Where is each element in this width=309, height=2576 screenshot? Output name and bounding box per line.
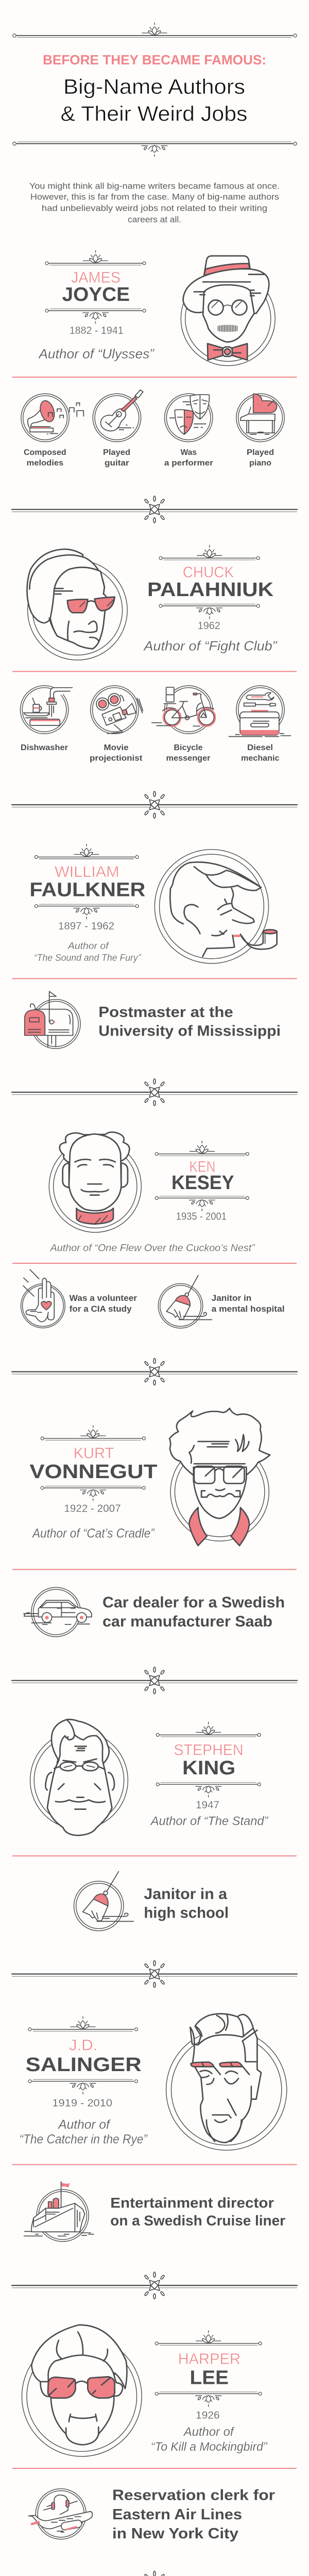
name: LEE xyxy=(190,2367,229,2388)
icon: mailbox xyxy=(25,991,80,1048)
name xyxy=(62,269,130,306)
icon: broom xyxy=(158,1275,212,1328)
intro text: However, this is far from the case. Many of big-name authors xyxy=(30,193,279,202)
ornament xyxy=(155,2331,262,2345)
ornament xyxy=(28,2079,138,2094)
icon: airplane and headset xyxy=(28,2489,92,2539)
icon: bicycle xyxy=(152,686,216,734)
label xyxy=(103,448,130,468)
title xyxy=(43,52,266,126)
ornament xyxy=(156,1722,261,1737)
pink rule xyxy=(12,671,297,672)
ornament xyxy=(35,844,139,859)
job text: Entertainment director xyxy=(110,2195,274,2211)
ornament xyxy=(45,309,146,324)
ornament xyxy=(155,2392,262,2406)
job text: on a Swedish Cruise liner xyxy=(110,2212,285,2228)
label: melodies xyxy=(27,459,63,468)
portrait: Lee xyxy=(22,2325,142,2456)
book: Author of “Cat’s Cradle” xyxy=(31,1526,155,1540)
job text: Car dealer for a Swedish xyxy=(102,1594,285,1611)
name: KURT xyxy=(74,1445,114,1462)
intro text: had unbelievably weird jobs not related to their writing xyxy=(42,204,267,213)
job text xyxy=(112,2487,275,2542)
name: KING xyxy=(182,1757,235,1779)
intro text xyxy=(29,182,280,224)
pink rule xyxy=(12,1569,297,1570)
job text xyxy=(98,1004,281,1040)
job text: Reservation clerk for xyxy=(112,2487,275,2503)
job text: Postmaster at the xyxy=(98,1004,233,1021)
portrait: Salinger xyxy=(166,2014,287,2150)
label xyxy=(164,448,213,468)
ornament xyxy=(159,604,260,619)
job text: Janitor in a xyxy=(144,1886,227,1903)
panel: James Joyce xyxy=(38,250,275,366)
label: Played xyxy=(103,448,130,457)
icon: hand with heart xyxy=(21,1269,65,1328)
name: FAULKNER xyxy=(29,879,145,901)
name xyxy=(29,1445,157,1483)
book: “The Sound and The Fury” xyxy=(34,952,141,963)
intro text: You might think all big-name writers became famous at once. xyxy=(29,182,280,191)
job text: Eastern Air Lines xyxy=(112,2506,242,2523)
pink rule xyxy=(12,2164,297,2165)
panel: J.D. Salinger xyxy=(20,2014,287,2150)
name: KEN xyxy=(189,1158,215,1176)
name: J.D. xyxy=(69,2037,97,2054)
icon: theatre masks xyxy=(165,394,213,442)
book: Author of “Fight Club” xyxy=(143,638,278,653)
name: JAMES xyxy=(71,269,121,286)
name: SALINGER xyxy=(26,2054,142,2076)
name xyxy=(178,2350,241,2388)
job text: University of Mississippi xyxy=(98,1023,281,1040)
ornament xyxy=(155,1196,249,1211)
years: 1922 - 2007 xyxy=(64,1503,121,1515)
name: HARPER xyxy=(178,2350,241,2367)
book: Author of xyxy=(57,2117,111,2132)
job text: a mental hospital xyxy=(212,1304,285,1314)
panel: Kurt Vonnegut xyxy=(29,1409,270,1546)
years: 1897 - 1962 xyxy=(58,921,114,932)
title: BEFORE THEY BECAME FAMOUS: xyxy=(43,52,266,67)
name: VONNEGUT xyxy=(29,1461,157,1483)
job text xyxy=(110,2195,285,2228)
book: Author of xyxy=(67,940,109,951)
book: Author of “One Flew Over the Cuckoo’s Nest” xyxy=(50,1243,255,1254)
intro text: careers at all. xyxy=(128,215,181,224)
ornament xyxy=(156,1783,261,1797)
name: KESEY xyxy=(171,1172,234,1194)
years: 1935 - 2001 xyxy=(176,1211,227,1222)
name xyxy=(29,863,145,901)
portrait: King xyxy=(30,1719,128,1835)
ornament xyxy=(41,1426,145,1440)
book: Author of “Ulysses” xyxy=(38,346,154,362)
pink rule xyxy=(12,1263,297,1264)
years: 1926 xyxy=(196,2410,220,2421)
label xyxy=(90,743,143,762)
job text xyxy=(70,1294,138,1314)
book: “The Catcher in the Rye” xyxy=(20,2132,148,2147)
title: Big-Name Authors xyxy=(63,75,245,98)
book: Author of “The Stand” xyxy=(150,1814,268,1828)
icon: car xyxy=(24,1587,92,1637)
ornament xyxy=(35,904,139,919)
icon: piano xyxy=(236,394,284,442)
header ornament bottom xyxy=(13,142,297,157)
icon: broom xyxy=(74,1872,133,1931)
portrait: Palahniuk xyxy=(27,549,127,660)
name xyxy=(147,564,274,601)
name: PALAHNIUK xyxy=(147,579,274,601)
name xyxy=(171,1158,234,1194)
ornament xyxy=(28,2016,138,2031)
pink rule xyxy=(12,1855,297,1856)
name: WILLIAM xyxy=(55,863,119,880)
book xyxy=(34,940,141,963)
job text: high school xyxy=(144,1904,229,1922)
label: Movie xyxy=(104,743,129,752)
job text: in New York City xyxy=(112,2526,238,2542)
book xyxy=(151,2425,267,2454)
label: Composed xyxy=(24,448,66,457)
header ornament top xyxy=(13,23,297,37)
icon: toolbox xyxy=(229,686,290,737)
ornament xyxy=(155,1141,249,1156)
label: Bicycle xyxy=(174,743,203,752)
label: Played xyxy=(247,448,274,457)
portrait: Kesey xyxy=(49,1132,141,1232)
panel: Ken Kesey xyxy=(49,1132,255,1254)
job text xyxy=(102,1594,285,1630)
job text xyxy=(144,1886,229,1922)
icon: guitar xyxy=(93,390,143,442)
pink rule xyxy=(12,978,297,979)
label xyxy=(241,743,280,762)
title: & Their Weird Jobs xyxy=(61,102,248,126)
label xyxy=(24,448,66,468)
label: messenger xyxy=(166,754,210,762)
panel: William Faulkner xyxy=(29,844,277,963)
label: Diesel xyxy=(247,743,273,752)
icon: dishes xyxy=(20,686,72,734)
label xyxy=(247,448,274,468)
label xyxy=(166,743,210,762)
job text: Was a volunteer xyxy=(70,1294,138,1303)
years: 1919 - 2010 xyxy=(52,2098,112,2109)
pink rule xyxy=(12,2468,297,2469)
name: STEPHEN xyxy=(174,1741,243,1758)
job text xyxy=(212,1294,285,1314)
job text: for a CIA study xyxy=(70,1304,132,1314)
label: a performer xyxy=(164,459,213,468)
ornament xyxy=(45,250,146,265)
job text: car manufacturer Saab xyxy=(102,1613,272,1630)
label: guitar xyxy=(105,459,129,468)
job icons: Joyce xyxy=(21,390,284,468)
years: 1882 - 1941 xyxy=(70,325,124,336)
book: “To Kill a Mockingbird” xyxy=(151,2440,267,2454)
years: 1962 xyxy=(198,620,220,632)
panel: Chuck Palahniuk xyxy=(27,545,278,660)
label: Dishwasher xyxy=(21,743,68,752)
panel: Stephen King xyxy=(30,1719,268,1835)
book xyxy=(20,2117,148,2147)
icon: film camera xyxy=(91,686,143,734)
portrait: Joyce xyxy=(181,256,275,366)
label: mechanic xyxy=(241,754,280,762)
portrait: Vonnegut xyxy=(169,1409,270,1546)
label: Was xyxy=(180,448,197,457)
portrait: Faulkner xyxy=(154,850,277,963)
ornament xyxy=(41,1486,145,1501)
name: JOYCE xyxy=(62,284,130,306)
job text: Janitor in xyxy=(212,1294,251,1303)
icon: gramophone xyxy=(21,394,83,442)
icon: cruise ship xyxy=(24,2181,94,2242)
ornament xyxy=(159,545,260,560)
name xyxy=(174,1741,243,1779)
job icons: Palahniuk xyxy=(20,686,290,762)
book: Author of xyxy=(183,2425,235,2439)
panel: Harper Lee xyxy=(22,2325,267,2456)
name: CHUCK xyxy=(183,564,234,581)
pink rule xyxy=(12,377,297,378)
years: 1947 xyxy=(196,1800,219,1811)
name xyxy=(26,2037,142,2076)
label: piano xyxy=(249,459,271,468)
label: projectionist xyxy=(90,754,143,762)
